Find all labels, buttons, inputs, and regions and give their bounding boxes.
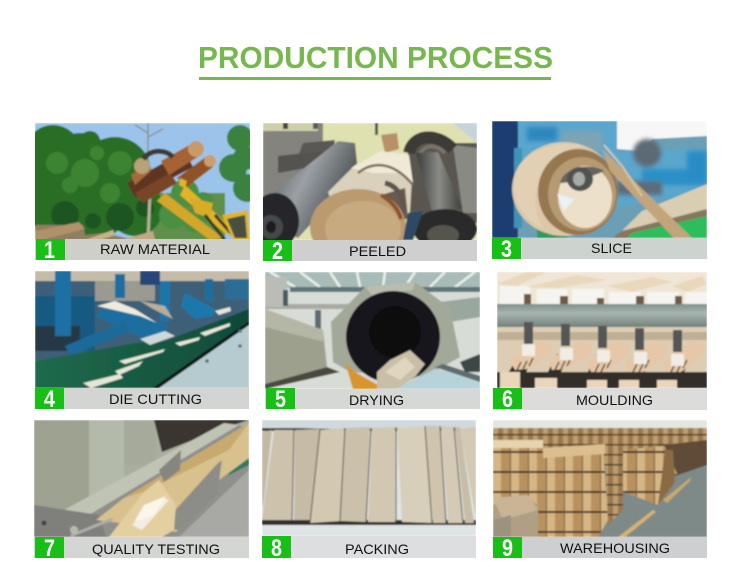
panel: drying <box>265 272 480 413</box>
photo: die cutting machines with green belt <box>35 271 249 388</box>
number badge 7: 7 <box>44 535 55 562</box>
panel: peeled <box>251 123 477 265</box>
label bar <box>35 388 249 409</box>
number badge 1 <box>36 237 65 264</box>
number badge 4 <box>35 386 64 413</box>
label text: PEELED <box>349 243 406 259</box>
label text: PACKING <box>345 541 409 557</box>
photo: log between peeling rollers <box>263 123 477 240</box>
photo: log loader lifting timber <box>35 123 250 239</box>
number badge 9 <box>493 535 522 562</box>
label text: WAREHOUSING <box>560 540 670 556</box>
photo: warehouse with stacked cartons <box>493 420 707 537</box>
panel: moulding <box>493 272 707 413</box>
label text: MOULDING <box>576 392 653 408</box>
label bar <box>265 389 480 409</box>
photo: rotary drying drum <box>265 272 480 389</box>
number badge 6 <box>493 386 522 413</box>
label text: SLICE <box>591 240 632 256</box>
panel: warehousing <box>493 420 707 562</box>
number badge 8: 8 <box>271 535 282 562</box>
photo: roll of wood veneer <box>492 121 707 238</box>
label text: QUALITY TESTING <box>92 541 220 557</box>
label bar <box>493 537 707 558</box>
panel: packing <box>262 420 476 562</box>
number badge 3 <box>492 236 521 263</box>
panel: raw material <box>20 123 261 264</box>
number badge 5 <box>266 386 295 413</box>
number badge 7 <box>35 535 64 562</box>
title <box>198 40 553 80</box>
label text: RAW MATERIAL <box>100 241 210 257</box>
photo: row of kraft paper packets <box>262 420 476 536</box>
number badge 2 <box>263 238 292 265</box>
number badge 4: 4 <box>44 386 56 413</box>
panel: quality testing <box>34 420 249 562</box>
panel: slice <box>492 121 707 263</box>
heading text: PRODUCTION PROCESS <box>198 40 553 75</box>
label text: DRYING <box>349 392 404 408</box>
number badge 8 <box>262 535 291 562</box>
number badge 6: 6 <box>502 386 513 413</box>
photo: moulding press with combs and springs <box>497 272 707 388</box>
panel: die cutting <box>35 271 249 413</box>
label bar <box>262 536 476 558</box>
label bar <box>34 537 249 558</box>
label bar <box>263 240 477 261</box>
label bar <box>492 238 707 259</box>
label bar <box>35 239 250 260</box>
number badge 2: 2 <box>272 238 283 265</box>
label bar <box>493 388 707 410</box>
number badge 9: 9 <box>502 535 513 562</box>
number badge 1: 1 <box>44 237 55 264</box>
title underline <box>199 77 551 80</box>
photo: paper sleeves on conveyor <box>34 420 249 537</box>
label text: DIE CUTTING <box>109 391 202 407</box>
number badge 5: 5 <box>275 386 286 413</box>
number badge 3: 3 <box>501 236 512 263</box>
